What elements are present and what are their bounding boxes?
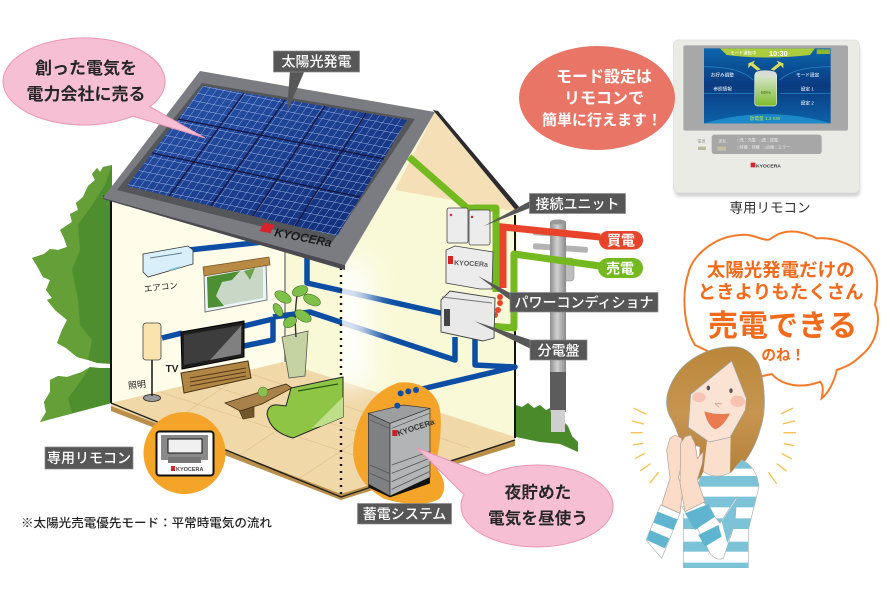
bubble: sell to utility: [3, 38, 205, 138]
label: power conditioner: パワーコンディショナ: [514, 294, 654, 310]
speech bubble: [684, 232, 878, 398]
remote control photo: 電源: [697, 138, 705, 144]
bubble text: のね！: [761, 347, 805, 364]
speech bubble and woman: [631, 232, 878, 570]
label: storage system: 蓄電システム: [363, 506, 446, 522]
excitement rays: [631, 408, 795, 483]
remote control photo: □待機：待機 □点検：エラー: [737, 144, 790, 150]
bubble: easy mode setting: モード設定は: [556, 68, 652, 86]
label: distribution board: [474, 321, 587, 360]
remote control photo: モード運転中: [730, 50, 756, 57]
neck: [703, 435, 731, 478]
bubble: easy mode setting: 簡単に行えます！: [542, 111, 662, 129]
television set: [181, 321, 251, 393]
bubble: easy mode setting: [519, 46, 675, 150]
label: bought power: [599, 231, 643, 250]
remote control photo: お好み調整: [711, 72, 734, 79]
bubble: use at daytime: 夜貯めた: [505, 483, 571, 502]
label: solar power: [274, 51, 360, 112]
mini remote circle: [144, 412, 226, 494]
power conditioner: KYOCERa: [454, 260, 488, 269]
air conditioner: [143, 246, 193, 277]
label: storage system: [358, 504, 452, 524]
dotted outline of house corner: [340, 268, 342, 497]
left sleeve: [646, 505, 680, 558]
coffee table: [225, 384, 292, 419]
bubble: easy mode setting: リモコンで: [564, 90, 644, 108]
battery wire dots: [394, 387, 419, 409]
label: air conditioner: エアコン: [143, 280, 178, 294]
remote control photo: 運転: [718, 138, 726, 144]
wiring: bought power red line: [492, 227, 600, 318]
window: [203, 257, 270, 312]
label: solar power: 太陽光発電: [282, 54, 352, 70]
mini remote circle: KYOCERA: [176, 467, 204, 473]
label: dedicated remote: [45, 447, 133, 469]
label: TV: TV: [166, 364, 179, 375]
remote control photo: KYOCERA: [756, 163, 781, 169]
connection unit: [447, 208, 490, 245]
remote control photo: 設定 1: [801, 86, 814, 93]
hair: [666, 347, 764, 480]
footnote: ※太陽光売電優先モード：平常時電気の流れ: [21, 515, 272, 530]
remote control photo: 参照情報: [713, 86, 732, 93]
label: connection unit: 接続ユニット: [536, 196, 620, 212]
power conditioner: [446, 246, 493, 289]
remote control photo: 設定 2: [801, 100, 814, 107]
roof with solar array: [103, 71, 435, 270]
floor lamp: [143, 323, 161, 402]
left interior wall: [111, 197, 285, 403]
remote control photo: モード設定: [796, 72, 820, 79]
right sleeve: [682, 497, 737, 559]
wiring: solar connection dots: [392, 138, 408, 155]
label: bought power: 買電: [607, 232, 635, 248]
label: sold power: [598, 258, 643, 278]
label: distribution board: 分電盤: [538, 342, 580, 358]
remote control photo: □充：充電 □放：放電: [737, 137, 778, 143]
label: power conditioner: [478, 276, 658, 312]
label: connection unit: [484, 194, 626, 226]
bubble: use at daytime: 電気を昼使う: [488, 509, 588, 528]
caption: dedicated remote: 専用リモコン: [730, 200, 810, 216]
bubble: sell to utility: 創った電気を: [35, 59, 137, 78]
remote control photo: 放電量 1.2 KW: [750, 115, 781, 122]
remote control photo: [673, 40, 860, 197]
utility pole: [533, 220, 588, 432]
shirt: [684, 460, 759, 568]
wiring: household blue lines: [162, 241, 515, 389]
bush at corner: [516, 403, 578, 452]
bubble text: 売電できる: [708, 310, 857, 343]
solar panels: [127, 86, 407, 236]
sofa: [267, 377, 343, 438]
right interior wall: [283, 190, 515, 437]
remote control photo: 80%: [761, 90, 772, 96]
remote control photo: 10:30: [769, 49, 788, 58]
label: lighting: 照明: [128, 379, 146, 391]
roof gable edge: [433, 110, 520, 213]
eyes: [707, 386, 733, 393]
bubble text: [698, 260, 864, 364]
wiring: sold power green line: [409, 157, 600, 328]
bubble: sell to utility: 電力会社に売る: [26, 84, 146, 104]
label: dedicated remote: 専用リモコン: [47, 450, 131, 466]
tree behind house: [32, 165, 112, 422]
forearms and hands: [662, 435, 705, 513]
face: [688, 361, 746, 442]
bubble: use at daytime: [417, 448, 613, 547]
attic gable: [341, 112, 518, 497]
roof slab: [103, 195, 345, 270]
distribution board: [441, 291, 495, 341]
blush: [692, 392, 745, 407]
mouth: [704, 411, 730, 429]
label: sold power: 売電: [606, 260, 634, 276]
storage battery highlight and unit: [353, 382, 444, 504]
battery cabinet: KYOCERa: [396, 417, 436, 438]
bubble text: 太陽光発電だけの: [707, 260, 855, 281]
bubble text: ときよりもたくさん: [698, 281, 864, 302]
Kyocera logo on roof: KYOCERa: [273, 225, 333, 250]
wall light fade: [322, 262, 372, 387]
potted plant: [271, 284, 322, 378]
floor: [111, 362, 515, 497]
house structure: [111, 112, 518, 500]
